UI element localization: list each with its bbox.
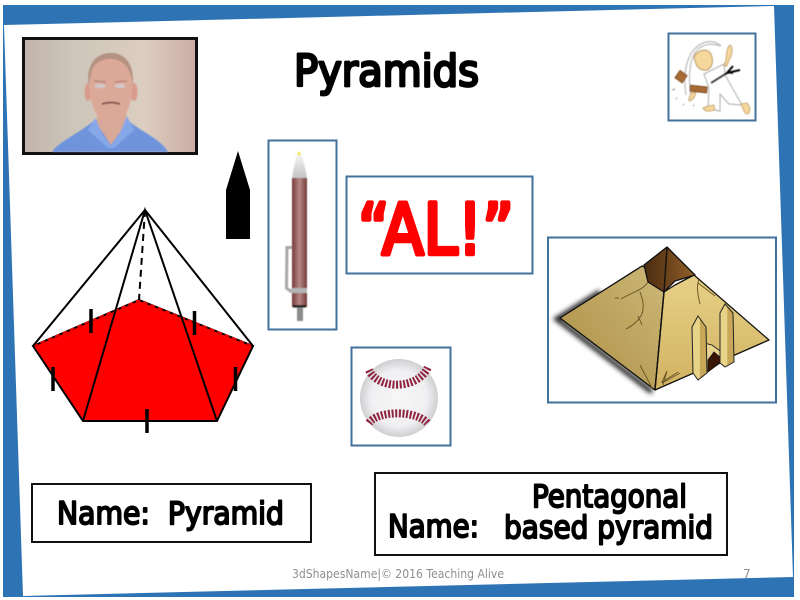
icon: karate chop box xyxy=(668,34,756,120)
footer text: 3dShapesName|© 2016 Teaching Alive xyxy=(292,567,504,581)
baseball box xyxy=(352,348,450,446)
name box: pyramid xyxy=(32,484,311,542)
presenter figure xyxy=(52,53,168,152)
egyptian pyramid box xyxy=(548,238,776,402)
pyramid edges xyxy=(33,210,253,421)
icon: black pencil shape xyxy=(226,151,250,239)
webcam presenter photo xyxy=(24,38,196,154)
slide number: 7 xyxy=(743,567,751,581)
icon: pyramid illustration xyxy=(557,247,769,392)
doorway xyxy=(704,343,723,372)
name box: pentagonal based pyramid xyxy=(375,473,727,555)
name box: pentagonal based pyramid: based pyramid xyxy=(504,510,713,546)
name box: pyramid: Name: Pyramid xyxy=(57,496,284,532)
equal side ticks xyxy=(53,309,236,433)
pencil box xyxy=(268,140,336,330)
callout: AL: “AL!” xyxy=(358,189,514,271)
name box: pentagonal based pyramid: Pentagonal xyxy=(532,479,687,515)
name box: pentagonal based pyramid: Name: xyxy=(388,509,479,545)
obelisks xyxy=(692,304,734,380)
title: Pyramids xyxy=(294,46,479,97)
icon: baseball xyxy=(360,359,438,437)
red pentagon base xyxy=(33,300,253,421)
karate figure xyxy=(672,42,750,114)
pyramid diagram xyxy=(33,210,253,433)
icon: mechanical pencil xyxy=(286,151,307,321)
